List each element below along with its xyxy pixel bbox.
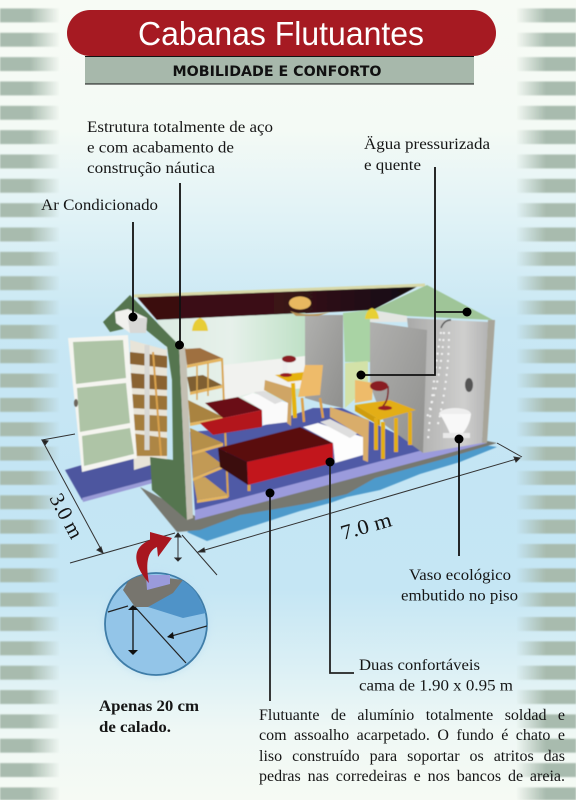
label: steel structure: e com acabamento de — [87, 140, 234, 156]
label: toilet: Vaso ecológico — [409, 567, 511, 584]
ceiling — [137, 285, 420, 320]
leader: toilet — [454, 434, 464, 556]
shower and water — [426, 320, 451, 440]
subtitle bar: MOBILIDADE E CONFORTO — [172, 64, 382, 80]
label: draft: Apenas 20 cm — [99, 698, 199, 715]
dimension: length: 7.0 m — [338, 507, 394, 545]
subtitle bar — [85, 56, 474, 84]
label: steel structure: Estrutura totalmente de aço — [87, 119, 273, 136]
tiled back wall — [157, 313, 305, 420]
leader: steel structure — [175, 183, 184, 350]
screen door — [68, 335, 137, 472]
aluminium hull — [140, 441, 497, 532]
floating cabin illustration — [65, 285, 497, 541]
back bed — [200, 380, 292, 435]
roof beam — [133, 285, 425, 296]
label: pressurized water: e quente — [364, 157, 421, 174]
partition walls — [305, 315, 343, 408]
bathroom wall — [407, 318, 488, 453]
label: pressurized water: Ägua pressurizada — [364, 135, 490, 153]
right gable — [373, 285, 493, 320]
green wall — [343, 310, 370, 362]
float description: pedras nas corredeiras e nos bancos de areia. — [259, 768, 565, 785]
entrance deck — [65, 445, 153, 500]
label: beds: Duas confortáveis — [359, 657, 480, 674]
green end wall — [103, 295, 187, 520]
float description: liso construído para soportar os atritos das — [259, 748, 565, 765]
rear shelves — [130, 340, 167, 470]
label: air conditioning: Ar Condicionado — [41, 197, 158, 214]
ceiling fan and lamps — [192, 296, 379, 331]
cabinet — [345, 361, 368, 408]
front bed — [218, 407, 369, 491]
dimension lines — [42, 434, 522, 575]
left decorative stripes — [0, 0, 60, 800]
label: steel structure: construção náutica — [87, 160, 215, 177]
leader: beds — [326, 458, 354, 673]
label: beds: cama de 1.90 x 0.95 m — [359, 678, 514, 694]
float description — [259, 706, 565, 785]
float description: Flutuante de alumínio totalmente soldad e — [259, 706, 565, 724]
desk and chair 1 — [275, 356, 323, 422]
float description: com assoalho acarpetado. O fundo é chato e — [259, 727, 565, 744]
title banner — [67, 10, 496, 56]
leader: air conditioning — [128, 222, 138, 322]
title banner: Cabanas Flutuantes — [138, 15, 424, 52]
label: toilet: embutido no piso — [401, 588, 518, 604]
dimension: width: 3.0 m — [45, 489, 88, 543]
ecological toilet — [439, 378, 473, 438]
leader: pressurized water — [356, 167, 472, 380]
carpeted floor — [190, 408, 482, 512]
front shelves — [185, 348, 228, 503]
deck edge — [195, 435, 487, 520]
magnified draft detail — [102, 570, 210, 678]
right corner post — [482, 320, 495, 443]
draft vertical arrow — [175, 533, 181, 561]
air conditioner — [115, 309, 147, 333]
desk and chair 2 — [355, 380, 416, 459]
label: draft: de calado. — [99, 719, 171, 736]
water under the hull — [187, 445, 497, 541]
right decorative stripes — [516, 0, 576, 800]
red curved arrow — [136, 532, 172, 583]
leader: float — [266, 488, 274, 701]
